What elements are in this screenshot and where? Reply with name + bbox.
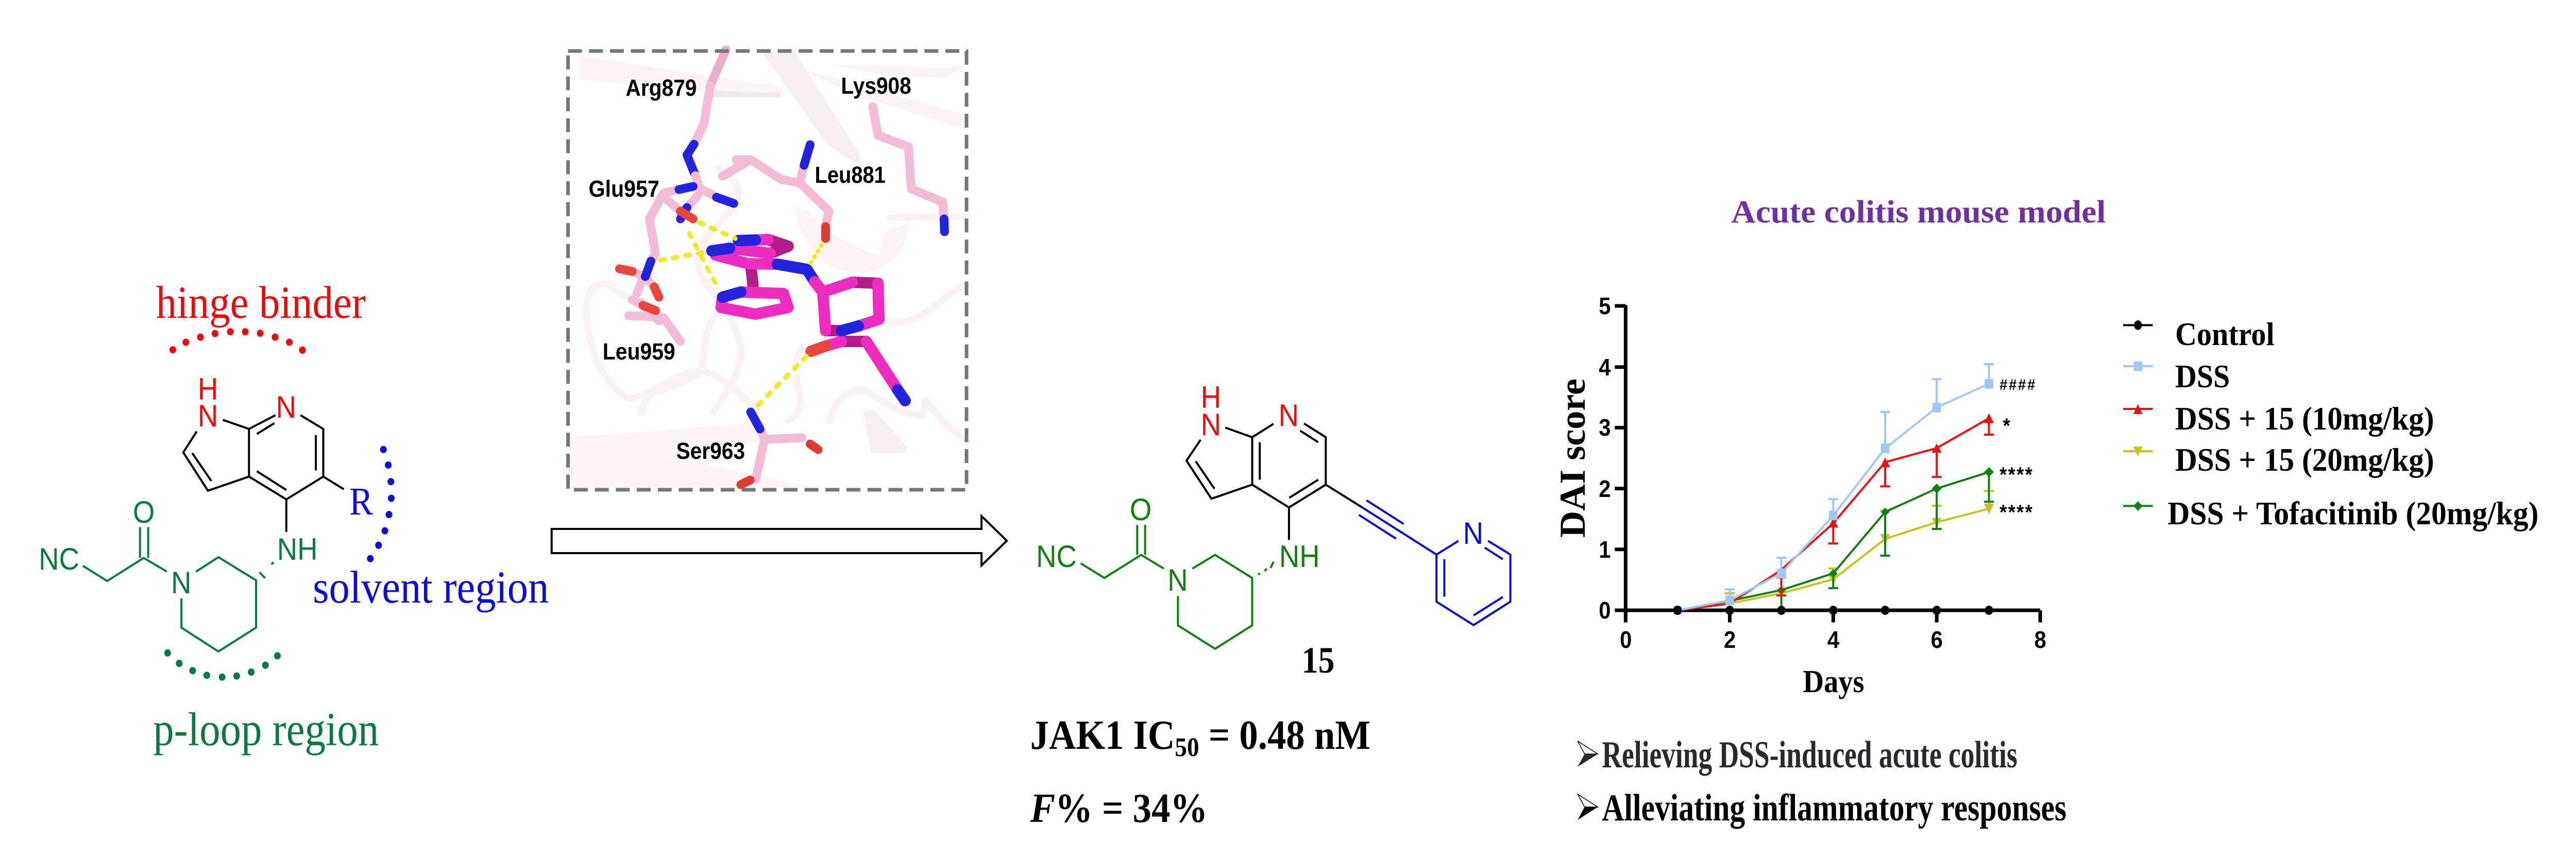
atom labels: compound: N bbox=[1463, 517, 1483, 551]
y tick labels: 2 bbox=[1599, 476, 1611, 502]
residue labels: Ser963 bbox=[676, 438, 745, 464]
bullet: alleviating inflammation bbox=[1578, 787, 2066, 829]
R group label: R bbox=[349, 479, 374, 523]
residue labels: Glu957 bbox=[589, 176, 659, 202]
residue labels bbox=[589, 73, 911, 464]
x tick labels: 2 bbox=[1724, 627, 1736, 653]
series: DSS 15 10 mg/kg bbox=[1677, 414, 1994, 610]
atom labels: scaffold: N bbox=[171, 566, 191, 600]
series: DSS 15 20 mg/kg bbox=[1677, 491, 1994, 610]
line chart: DAI score bbox=[1553, 293, 2046, 699]
dotted arc: p-loop region bbox=[164, 649, 281, 681]
x tick labels: 6 bbox=[1931, 627, 1943, 653]
panel: scaffold with regions bbox=[39, 278, 549, 756]
atom labels: compound: NC bbox=[1036, 540, 1077, 574]
significance marks: * bbox=[2003, 414, 2010, 437]
panel: compound 15 bbox=[1030, 381, 1511, 831]
bullet: relieving colitis bbox=[1578, 734, 2018, 776]
residue labels: Leu959 bbox=[603, 339, 675, 365]
axes bbox=[1615, 305, 2040, 623]
findings list bbox=[1578, 734, 2066, 829]
significance marks: #### bbox=[1999, 376, 2036, 393]
atom labels: compound bbox=[1036, 381, 1483, 598]
y tick labels: 5 bbox=[1599, 293, 1611, 319]
heading: solvent region: solvent region bbox=[313, 562, 549, 613]
atom labels: scaffold: N bbox=[198, 399, 218, 434]
heading: hinge binder: hinge binder bbox=[156, 278, 366, 328]
protein loops and helix bbox=[587, 168, 967, 453]
residue labels: Arg879 bbox=[625, 75, 697, 101]
y tick labels: 1 bbox=[1599, 537, 1611, 563]
ligand sticks bbox=[712, 239, 905, 401]
potency text: 50 bbox=[1175, 732, 1199, 762]
compound number: 15 bbox=[1302, 640, 1334, 681]
legend labels: Control bbox=[2175, 317, 2275, 353]
protein sheets bbox=[569, 52, 966, 488]
icon: arrowhead bullet bbox=[1578, 741, 1598, 767]
finding text: Alleviating inflammatory responses bbox=[1602, 787, 2066, 829]
y tick labels: 3 bbox=[1599, 415, 1611, 441]
legend labels: DSS + Tofacitinib (20mg/kg) bbox=[2167, 496, 2538, 532]
atom labels: compound: NH bbox=[1279, 540, 1320, 574]
legend labels bbox=[2167, 317, 2538, 532]
series: control bbox=[1673, 606, 1993, 615]
y tick labels bbox=[1599, 293, 1611, 624]
compound bonds: black bbox=[1187, 423, 1362, 540]
atom labels: scaffold bbox=[39, 372, 318, 600]
atom labels: scaffold: O bbox=[133, 495, 155, 530]
panel: docking pose bbox=[568, 50, 967, 490]
legend markers bbox=[2123, 320, 2153, 511]
atom labels: scaffold: N bbox=[276, 390, 296, 425]
legend labels: DSS + 15 (20mg/kg) bbox=[2175, 442, 2434, 478]
dotted arc: solvent region bbox=[367, 446, 395, 562]
atom labels: compound: N bbox=[1279, 399, 1299, 433]
dashed frame bbox=[568, 51, 967, 490]
residue labels: Leu881 bbox=[815, 162, 886, 188]
x tick labels: 4 bbox=[1827, 627, 1840, 653]
x axis title: Days bbox=[1803, 664, 1864, 699]
compound bonds: blue bbox=[1359, 500, 1511, 625]
y axis title: DAI score bbox=[1553, 379, 1593, 538]
atom labels: scaffold: NC bbox=[39, 542, 79, 577]
significance marks: **** bbox=[1999, 463, 2032, 486]
residue sticks bbox=[620, 50, 944, 485]
x tick labels: 8 bbox=[2035, 627, 2046, 653]
dotted arc: hinge binder bbox=[170, 328, 306, 354]
x tick labels bbox=[1620, 627, 2046, 653]
significance marks bbox=[1999, 376, 2036, 524]
chart title: Acute colitis mouse model bbox=[1731, 194, 2106, 230]
atom labels: compound: N bbox=[1201, 408, 1221, 442]
legend labels: DSS bbox=[2175, 359, 2230, 395]
hydrogen bonds bbox=[660, 222, 822, 408]
legend labels: DSS + 15 (10mg/kg) bbox=[2175, 401, 2434, 437]
y tick labels: 0 bbox=[1599, 597, 1611, 624]
icon: arrowhead bullet bbox=[1578, 794, 1598, 820]
residue labels: Lys908 bbox=[841, 73, 911, 99]
panel: acute colitis model bbox=[1553, 194, 2538, 829]
finding text: Relieving DSS-induced acute colitis bbox=[1602, 734, 2018, 776]
potency text: = 0.48 nM bbox=[1199, 712, 1370, 758]
series: DSS Tofacitinib bbox=[1677, 467, 1994, 610]
bioavailability text: F% = 34% bbox=[1030, 785, 1208, 831]
atom labels: scaffold: H bbox=[198, 372, 218, 407]
scaffold bonds: black bbox=[183, 415, 344, 532]
potency text: JAK1 IC bbox=[1030, 712, 1175, 758]
series: DSS bbox=[1673, 364, 1994, 615]
atom labels: compound: H bbox=[1201, 381, 1221, 415]
atom labels: scaffold: NH bbox=[277, 533, 318, 567]
y tick labels: 4 bbox=[1599, 354, 1611, 381]
atom labels: compound: O bbox=[1130, 493, 1151, 527]
x tick labels: 0 bbox=[1620, 627, 1632, 653]
heading: p-loop region: p-loop region bbox=[153, 703, 379, 756]
scaffold bonds: green bbox=[83, 527, 274, 651]
compound bonds: green bbox=[1081, 525, 1274, 649]
significance marks: **** bbox=[1999, 501, 2032, 524]
arrow: hollow block arrow bbox=[552, 516, 1007, 565]
legend bbox=[2123, 317, 2538, 532]
atom labels: compound: N bbox=[1167, 563, 1188, 598]
